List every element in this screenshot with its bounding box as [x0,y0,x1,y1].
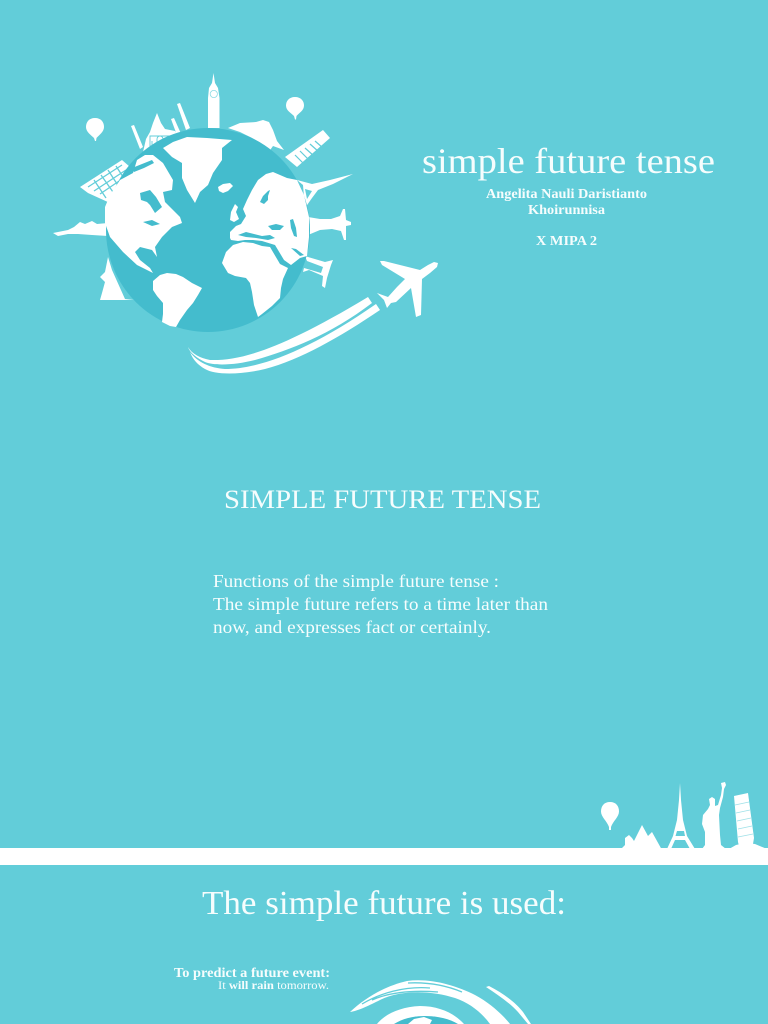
text block: functions: now, and expresses fact or certainly. [213,617,491,637]
icon: leaning tower [734,793,754,846]
continent: iceland [218,183,233,193]
icon: domed palace [131,103,190,154]
contrail upper band [188,297,372,364]
contrail lower band [190,304,380,374]
icon: gate tower [303,256,333,288]
swirl inner ring [377,1006,464,1024]
icon: leaning tower [285,130,330,167]
swirl globe top [394,1016,458,1024]
example heading: To predict a future event: [174,965,330,980]
icon: sphinx pyramid [100,257,134,300]
class label: X MIPA 2 [536,233,597,248]
title: simple future tense: simple future tense [422,141,715,181]
icon: christ statue [308,209,351,240]
swirl bristle lines [362,983,462,1004]
globe sphere [106,128,310,332]
continent: baltic cutout [260,190,270,204]
map: continents [105,137,309,327]
continent: africa [222,242,288,317]
swirl outer brush stroke [350,980,510,1024]
text block: functions: Functions of the simple future tense : [213,571,499,591]
icon: mountain top [228,120,284,153]
author name one: Angelita Nauli Daristianto [486,186,647,201]
continent: hudson bay cutout [140,190,162,213]
illustration: globe with landmarks [53,73,353,332]
icon: statue of liberty [702,782,726,849]
icon: swirl globe [350,980,531,1024]
swirl outer streak [486,986,531,1024]
heading: SIMPLE FUTURE TENSE: SIMPLE FUTURE TENSE [224,485,541,514]
white divider band with landmarks [0,782,768,865]
authors [486,186,647,248]
continent: great lakes cutout [143,220,160,226]
continent: arctic channel cutout [132,160,154,172]
icon: left balloon [86,118,104,141]
icon: balloon [601,802,619,830]
continent: eurasia [230,172,309,265]
icon: airplane with contrail [188,261,438,374]
heading: The simple future is used: The simple future is used: [202,885,566,922]
icon: hill under tower [729,843,767,849]
icon: right balloon [286,97,304,120]
continent: caspian cutout [290,219,297,237]
continent: north america [105,155,182,273]
icon: opera building [80,160,130,203]
swirl globe land [408,1017,432,1024]
continent: mediterranean cutout [238,232,275,240]
continent: black sea cutout [268,224,284,230]
airplane [377,261,438,317]
band [0,848,768,865]
example sentence: It will rain tomorrow. [218,978,329,992]
example text block [174,965,330,992]
icon: eiffel tower sideways [297,174,353,208]
icon: pyramids and sphinx [620,825,662,850]
icon: left statue [53,221,108,236]
continent: south america [153,273,202,327]
continent: britain [230,204,239,222]
author name two: Khoirunnisa [528,202,605,217]
text block: functions [213,571,548,637]
icon: eiffel tower [667,783,695,849]
icon: clock tower [208,73,220,128]
continent: greenland [163,137,232,203]
continent: persian gulf cutout [291,248,304,256]
text block: functions: The simple future refers to a time later than [213,594,548,614]
